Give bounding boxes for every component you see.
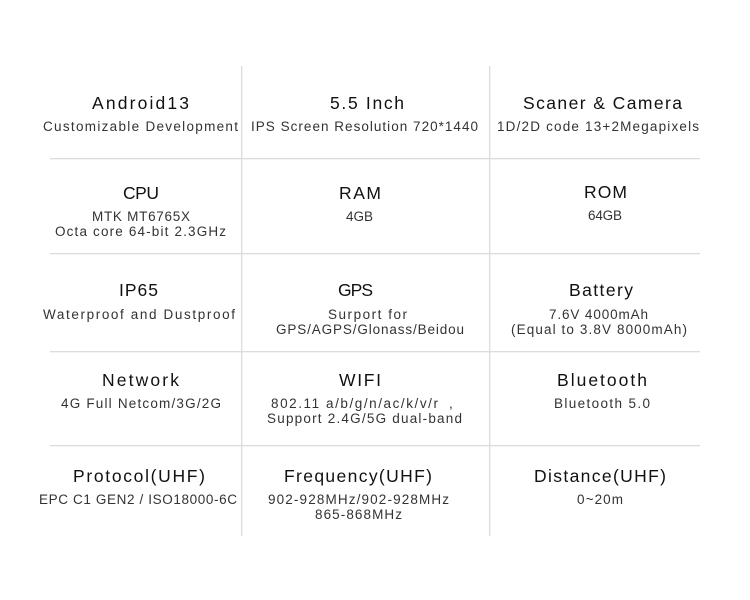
cell: Distance(UHF): Distance(UHF) xyxy=(534,466,666,486)
cell: Scaner & Camera xyxy=(497,93,699,134)
cell: Scaner & Camera: Scaner & Camera xyxy=(523,93,682,113)
cell: Scaner & Camera: 1D/2D code 13+2Megapixels xyxy=(497,119,699,134)
cell: WIFI: 802.11 a/b/g/n/ac/k/v/r xyxy=(271,396,438,411)
cell: 5.5 Inch: IPS Screen Resolution 720*1440 xyxy=(251,119,478,134)
cell: WIFI: WIFI xyxy=(339,370,381,390)
cell: Battery xyxy=(511,280,687,337)
cell: ROM xyxy=(584,182,627,223)
cell: CPU: CPU xyxy=(123,183,159,203)
cell: Distance(UHF) xyxy=(534,466,666,507)
cell: Frequency(UHF) xyxy=(268,466,449,522)
cell: Android13 xyxy=(43,93,238,134)
cell: Bluetooth xyxy=(554,370,650,411)
cell: IP65: Waterproof and Dustproof xyxy=(43,307,235,322)
cell: WIFI: , xyxy=(449,396,453,411)
cell: Frequency(UHF): 902-928MHz/902-928MHz xyxy=(268,492,449,507)
cell: IP65 xyxy=(43,280,235,322)
cell: Protocol(UHF): EPC C1 GEN2 / ISO18000-6C xyxy=(39,492,237,507)
cell: CPU: MTK MT6765X xyxy=(92,209,190,224)
cell: CPU xyxy=(55,183,226,239)
cell: WIFI: Support 2.4G/5G dual-band xyxy=(267,411,462,426)
cell: Frequency(UHF): Frequency(UHF) xyxy=(284,466,432,486)
cell: Protocol(UHF): Protocol(UHF) xyxy=(73,466,205,486)
cell: RAM: 4GB xyxy=(346,209,373,224)
cell: WIFI xyxy=(267,370,462,426)
cell: Network xyxy=(61,370,221,411)
cell: RAM xyxy=(339,183,381,224)
cell: Protocol(UHF) xyxy=(39,466,237,507)
cell: Android13: Customizable Development xyxy=(43,119,238,134)
cell: Bluetooth: Bluetooth xyxy=(557,370,647,390)
cell: Battery: 7.6V 4000mAh xyxy=(549,307,648,322)
cell: Android13: Android13 xyxy=(92,93,189,113)
cell: 5.5 Inch xyxy=(251,93,478,134)
cell: Distance(UHF): 0~20m xyxy=(577,492,623,507)
cell: Bluetooth: Bluetooth 5.0 xyxy=(554,396,650,411)
cell: ROM: 64GB xyxy=(588,208,622,223)
cell: 5.5 Inch: 5.5 Inch xyxy=(330,93,404,113)
cell: Frequency(UHF): 865-868MHz xyxy=(315,507,402,522)
cell: CPU: Octa core 64-bit 2.3GHz xyxy=(55,224,226,239)
cell: GPS: GPS/AGPS/Glonass/Beidou xyxy=(276,322,464,337)
cell: GPS: GPS xyxy=(338,280,373,300)
cell: Battery: Battery xyxy=(569,280,633,300)
cell: IP65: IP65 xyxy=(119,280,158,300)
cell: RAM: RAM xyxy=(339,183,381,203)
cell: GPS: Surport for xyxy=(328,307,408,322)
cell: GPS xyxy=(276,280,464,337)
cell: Network: Network xyxy=(102,370,179,390)
cell: Battery: (Equal to 3.8V 8000mAh) xyxy=(511,322,687,337)
cell: ROM: ROM xyxy=(584,182,627,202)
cell: Network: 4G Full Netcom/3G/2G xyxy=(61,396,221,411)
